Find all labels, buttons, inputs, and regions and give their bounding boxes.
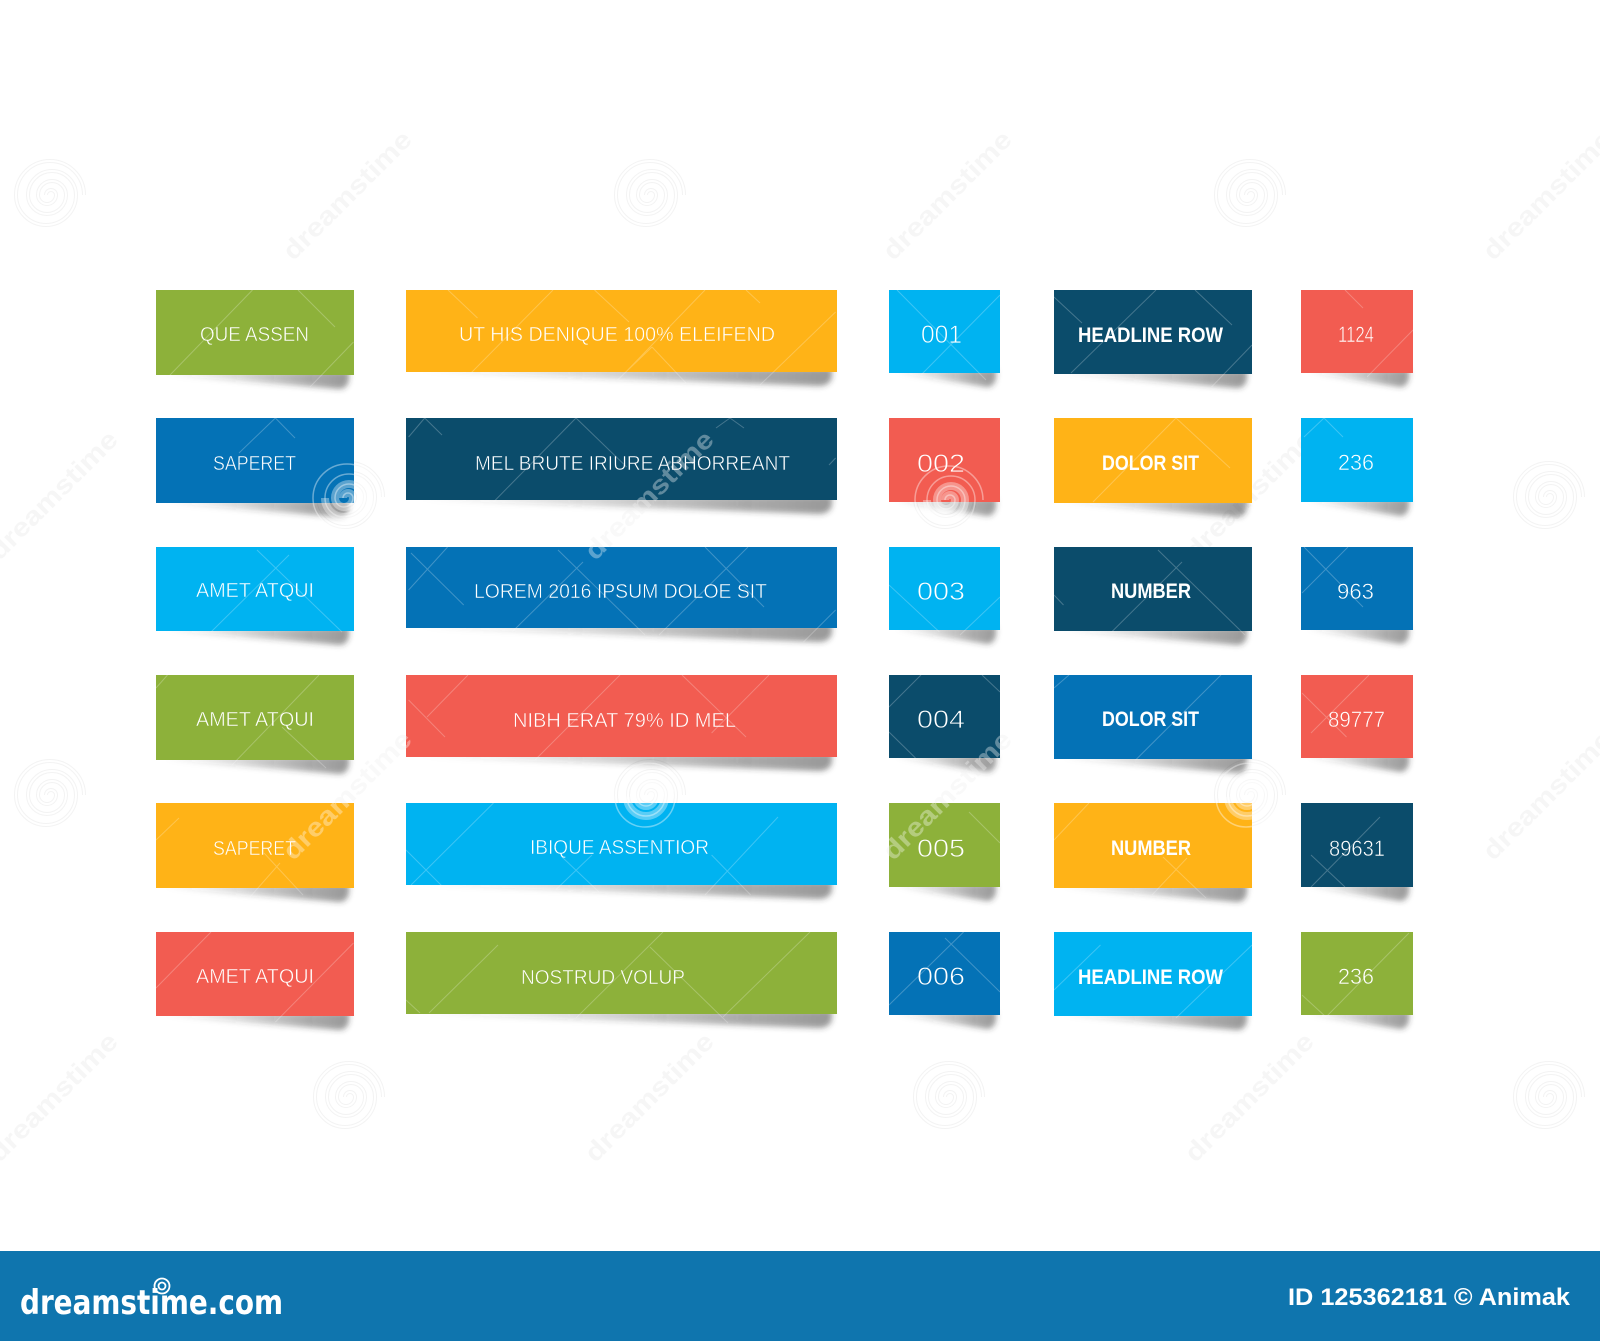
footer logo wordmark: dreamstime.com [20,1283,283,1323]
value: 89777: 89777 [1328,707,1385,732]
watermark: faint diagonal wordmarks on white: dreamstime [876,724,1018,866]
column 4: bold headline tabs [1054,290,1252,1030]
number: 002 [889,418,1000,516]
watermark: faint diagonal wordmarks on white: dreamstime [578,424,720,566]
watermark: faint diagonal wordmarks on white: dreamstime [578,1026,720,1168]
headline: NUMBER amber: NUMBER [1111,836,1191,860]
bar: NOSTRUD VOLUP: NOSTRUD VOLUP [521,966,685,989]
number: 003: 003 [917,578,965,606]
watermark: faint diagonal wordmarks on white: dreamstime [276,724,418,866]
number: 004: 004 [917,706,965,734]
number: 005: 005 [917,835,965,863]
column 3: index numbers [889,290,1000,1029]
number: 001 [889,290,1000,387]
number: 006: 006 [917,963,965,991]
number: 001: 001 [921,321,962,349]
footer logo spiral [154,1278,170,1294]
tab: AMET ATQUI red [156,932,354,1030]
watermark: faint diagonal wordmarks on white: dreamstime [1476,724,1600,866]
watermark: white overlay wordmarks on cards: dreamstime [578,424,720,566]
headline: DOLOR SIT amber: DOLOR SIT [1102,451,1199,475]
bar: UT HIS DENIQUE: UT HIS DENIQUE 100% ELEIFEND [459,323,775,346]
tab: AMET ATQUI cyan: AMET ATQUI [196,579,314,602]
watermark: faint diagonal wordmarks on white: dreamstime [876,124,1018,266]
column 1: label tabs [156,290,354,1030]
headline: HEADLINE ROW cyan [1054,932,1252,1030]
value: 963 [1301,547,1413,644]
value: 236 green [1301,932,1413,1029]
watermark: faint diagonal wordmarks on white [0,124,1600,1168]
value: 89631 [1301,803,1413,901]
value: 236 cyan [1301,418,1413,516]
footer banner [0,1251,1600,1341]
value: 236 cyan: 236 [1338,450,1374,475]
footer image id and credit: ID 125362181 © Animak [1288,1284,1570,1311]
bar: NIBH ERAT [406,675,837,771]
watermark: faint diagonal wordmarks on white: dreamstime [1178,424,1320,566]
column 5: value tabs [1301,290,1413,1029]
column 2: wide description bars [406,290,837,1028]
tab: QUE ASSEN [156,290,354,389]
tab: QUE ASSEN: QUE ASSEN [200,323,309,346]
tab: AMET ATQUI red: AMET ATQUI [196,965,314,988]
value: 89777 [1301,675,1413,772]
headline: NUMBER amber [1054,803,1252,902]
watermark: faint diagonal wordmarks on white: dreamstime [1476,124,1600,266]
watermark: faint diagonal wordmarks on white: dreamstime [1178,1026,1320,1168]
number: 002: 002 [917,450,965,478]
bar: IBIQUE ASSENTIOR: IBIQUE ASSENTIOR [530,836,709,859]
bar: LOREM 2016: LOREM 2016 IPSUM DOLOE SIT [474,580,767,603]
headline: HEADLINE ROW cyan: HEADLINE ROW [1078,965,1224,989]
value: 1124 [1301,290,1413,387]
bar: NOSTRUD VOLUP [406,932,837,1028]
watermark: white overlay wordmarks on cards: dreamstime [276,724,418,866]
value: 89631: 89631 [1329,836,1385,861]
tab: SAPERET blue: SAPERET [213,452,296,475]
number: 005 [889,803,1000,901]
bar: MEL BRUTE: MEL BRUTE IRIURE ABHORREANT [475,452,790,475]
watermark: faint diagonal wordmarks on white: dreamstime [276,124,418,266]
tab: AMET ATQUI green [156,675,354,774]
tab: SAPERET amber [156,803,354,902]
bar: NIBH ERAT: NIBH ERAT 79% ID MEL [513,709,736,732]
value: 963: 963 [1337,579,1374,604]
watermark: faint spirals on white [16,161,1583,1127]
bar: UT HIS DENIQUE [406,290,837,386]
watermark: white overlay wordmarks on cards [276,424,1018,866]
watermark: white overlay spirals on cards [313,464,1284,827]
number: 003 [889,547,1000,644]
headline: DOLOR SIT blue: DOLOR SIT [1102,707,1199,731]
tab: AMET ATQUI cyan [156,547,354,645]
tab: SAPERET blue [156,418,354,517]
headline: NUMBER navy: NUMBER [1111,579,1191,603]
headline: DOLOR SIT blue [1054,675,1252,773]
tab: AMET ATQUI green: AMET ATQUI [196,708,314,731]
bar: MEL BRUTE [406,418,837,514]
number: 006 [889,932,1000,1029]
bar: LOREM 2016 [406,547,837,642]
tab: SAPERET amber: SAPERET [213,837,296,860]
value: 236 green: 236 [1338,964,1374,989]
bar: IBIQUE ASSENTIOR [406,803,837,899]
headline: HEADLINE ROW navy: HEADLINE ROW [1078,323,1224,347]
headline: HEADLINE ROW navy [1054,290,1252,388]
watermark: white overlay wordmarks on cards: dreamstime [876,724,1018,866]
headline: DOLOR SIT amber [1054,418,1252,517]
headline: NUMBER navy [1054,547,1252,645]
value: 1124: 1124 [1338,322,1374,347]
number: 004 [889,675,1000,772]
